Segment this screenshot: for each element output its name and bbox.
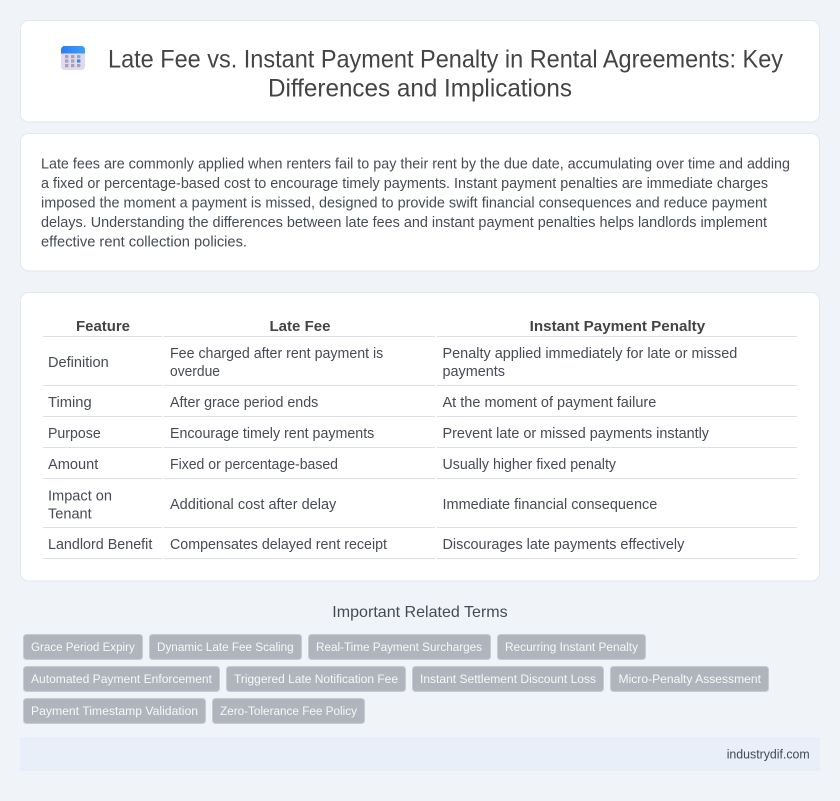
row: landlord benefit: Discourages late payments effectively	[442, 537, 685, 553]
row: impact on tenant: Impact on	[48, 488, 112, 504]
related term tags: Automated Payment Enforcement	[31, 672, 213, 686]
related term tags: Instant Settlement Discount Loss	[420, 672, 596, 686]
title	[108, 46, 784, 102]
row: impact on tenant: Immediate financial consequence	[442, 497, 657, 513]
related term tags	[24, 634, 768, 724]
related term tags: Real-Time Payment Surcharges	[316, 640, 482, 654]
row: timing: After grace period ends	[170, 395, 318, 411]
related term tags: Grace Period Expiry	[31, 640, 136, 654]
footer	[20, 737, 820, 771]
related term tags: Payment Timestamp Validation	[31, 704, 198, 718]
related term tags: Micro-Penalty Assessment	[618, 672, 762, 686]
row: amount: Usually higher fixed penalty	[442, 457, 617, 473]
intro paragraph: a fixed or percentage-based cost to encourage timely payments. Instant payment penalties are immediate charges	[41, 176, 768, 192]
row: impact on tenant: Tenant	[48, 506, 92, 522]
row: purpose: Encourage timely rent payments	[170, 426, 374, 442]
row: landlord benefit: Landlord Benefit	[48, 537, 152, 553]
intro paragraph	[41, 156, 790, 250]
heading: related terms: Important Related Terms	[332, 604, 508, 621]
row: purpose	[48, 426, 710, 442]
row: impact on tenant: Additional cost after delay	[170, 497, 337, 513]
table header	[76, 318, 706, 335]
footer: industrydif.com	[727, 747, 810, 761]
row: definition: payments	[442, 364, 505, 380]
related term tags: Recurring Instant Penalty	[505, 640, 639, 654]
row: timing: Timing	[48, 395, 92, 411]
row: purpose: Prevent late or missed payments instantly	[442, 426, 710, 442]
row: definition: Definition	[48, 355, 109, 371]
intro paragraph: effective rent collection policies.	[41, 234, 247, 250]
table header: Instant Payment Penalty	[530, 318, 706, 335]
panel: comparison table	[20, 292, 820, 581]
row: definition: Fee charged after rent payment is	[170, 346, 383, 362]
intro paragraph: Late fees are commonly applied when renters fail to pay their rent by the due date, accumulating over time and adding	[41, 156, 790, 172]
row: amount: Fixed or percentage-based	[170, 457, 338, 473]
title: Late Fee vs. Instant Payment Penalty in Rental Agreements: Key	[108, 46, 784, 74]
related term tags: Triggered Late Notification Fee	[234, 672, 398, 686]
title: Differences and Implications	[268, 76, 572, 102]
related term tags: Dynamic Late Fee Scaling	[157, 640, 294, 654]
row: amount	[48, 457, 617, 473]
table header: Feature	[76, 318, 130, 335]
intro paragraph: imposed the moment a payment is missed, designed to provide swift financial consequences and reduce payment	[41, 195, 767, 211]
table header: Late Fee	[270, 318, 330, 335]
intro paragraph: delays. Understanding the differences between late fees and instant payment penalties helps landlords implement	[41, 215, 767, 231]
row: impact on tenant	[48, 488, 657, 522]
row: timing	[48, 395, 656, 411]
panel: header	[20, 20, 820, 122]
row: landlord benefit: Compensates delayed rent receipt	[170, 537, 387, 553]
row: landlord benefit	[48, 537, 685, 553]
row: definition: Penalty applied immediately for late or missed	[442, 346, 737, 362]
row: amount: Amount	[48, 457, 98, 473]
row: definition	[48, 346, 737, 380]
panel: introduction	[20, 134, 820, 271]
row: definition: overdue	[170, 364, 220, 380]
icon: calendar	[61, 46, 85, 70]
row: purpose: Purpose	[48, 426, 101, 442]
related term tags: Zero-Tolerance Fee Policy	[220, 704, 358, 718]
row: timing: At the moment of payment failure	[442, 395, 656, 411]
